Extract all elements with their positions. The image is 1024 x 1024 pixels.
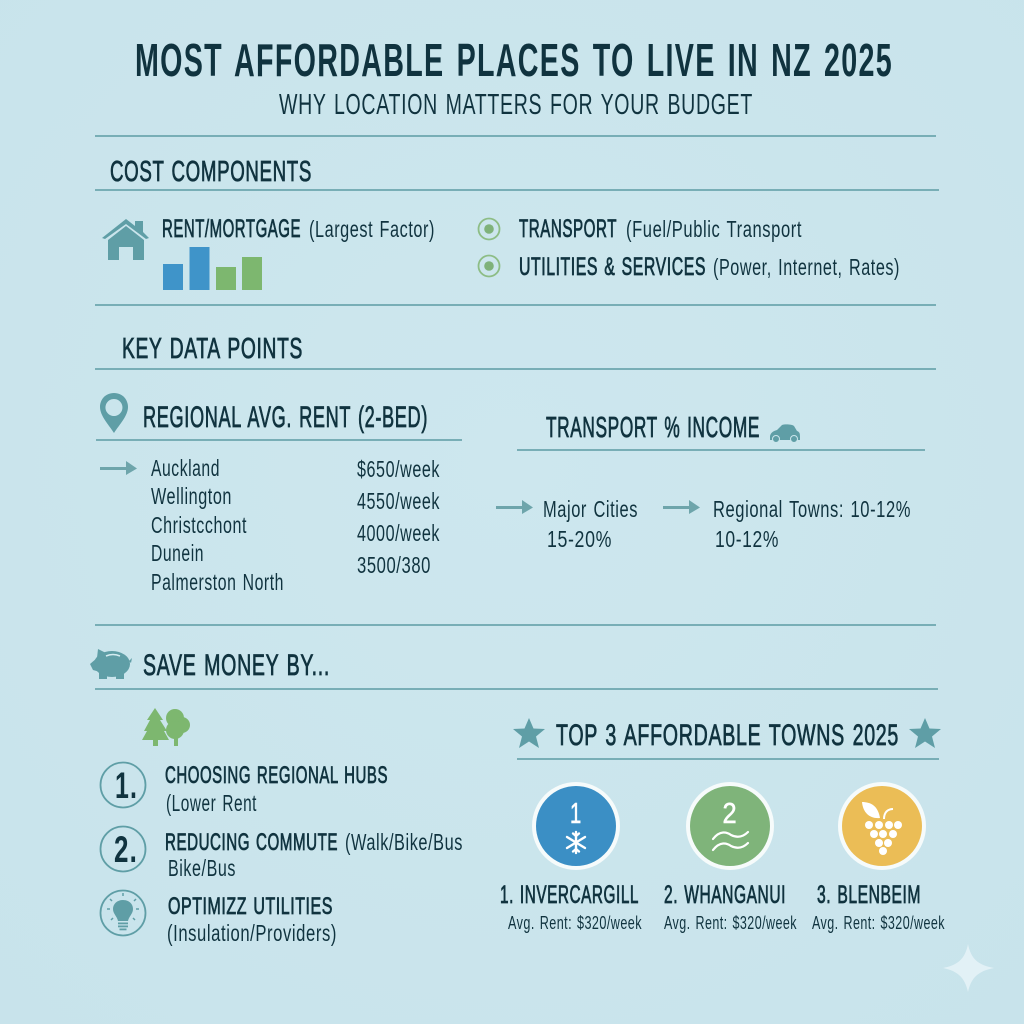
icon: car	[770, 424, 800, 442]
panel: top 3 affordable towns	[500, 718, 945, 933]
major cities value	[543, 496, 638, 552]
town 2 badge: 2	[722, 798, 738, 830]
panel: transport share of income	[496, 412, 925, 552]
tip 2: 2.	[114, 829, 138, 870]
major cities value: 15-20%	[547, 526, 612, 552]
rent values: $650/week	[357, 456, 440, 482]
tip 2: REDUCING COMMUTE	[165, 829, 338, 856]
town 3 label	[812, 881, 945, 933]
tip 3: OPTIMIZZ UTILITIES	[168, 893, 333, 920]
rent values	[357, 456, 440, 578]
heading: save money by: SAVE MONEY BY...	[143, 649, 330, 682]
text: rent or mortgage: (Largest Factor)	[309, 216, 435, 242]
heading: key data points: KEY DATA POINTS	[122, 333, 303, 365]
arrow	[663, 500, 700, 514]
tip 2	[100, 826, 463, 881]
heading: transport percent income: TRANSPORT % INCOME	[546, 412, 760, 444]
rent values: 4550/week	[357, 488, 440, 514]
city list	[151, 455, 284, 595]
text: utilities and services: (Power, Internet, Rates)	[713, 254, 900, 280]
rent values: 3500/380	[357, 552, 431, 578]
town 3 label: 3. BLENBEIM	[817, 881, 921, 909]
panel: save money	[90, 649, 463, 946]
icon: house	[102, 219, 149, 260]
arrow	[496, 500, 533, 514]
town 1 badge: 1	[570, 798, 582, 830]
town 2 badge	[686, 782, 774, 870]
town 2 label: Avg. Rent: $320/week	[664, 913, 797, 933]
heading: cost components: COST COMPONENTS	[110, 156, 312, 188]
subtitle: WHY LOCATION MATTERS FOR YOUR BUDGET	[279, 89, 753, 121]
tip 3: (Insulation/Providers)	[167, 920, 337, 946]
heading: regional average rent: REGIONAL AVG. RENT (2-BED)	[143, 401, 428, 434]
town 1 badge	[532, 782, 620, 870]
tip 1	[100, 762, 388, 816]
arrow	[100, 461, 137, 475]
tip 3	[100, 890, 337, 946]
city list: Palmerston North	[151, 569, 284, 595]
text: utilities and services: UTILITIES & SERVICES	[519, 253, 706, 281]
text: transport	[519, 215, 802, 243]
text: transport: (Fuel/Public Transport	[626, 216, 802, 242]
tip 2: Bike/Bus	[168, 855, 236, 881]
town 1 label: Avg. Rent: $320/week	[508, 913, 642, 933]
city list: Dunein	[151, 540, 204, 566]
town 3 label: Avg. Rent: $320/week	[812, 913, 945, 933]
city list: Auckland	[151, 455, 220, 481]
icon: right star	[909, 718, 941, 748]
icon: utilities bullet	[478, 256, 500, 276]
panel: regional average rent	[96, 393, 462, 595]
tip 1: 1.	[115, 765, 138, 806]
town 2 label: 2. WHANGANUI	[664, 881, 786, 909]
city list: Christcchont	[151, 512, 247, 538]
tip 1: (Lower Rent	[166, 790, 257, 816]
city list: Wellington	[151, 483, 232, 509]
tip 1: CHOOSING REGIONAL HUBS	[165, 762, 388, 789]
icon: left star	[513, 718, 545, 748]
text: transport: TRANSPORT	[519, 215, 617, 243]
major cities value: Major Cities	[543, 496, 638, 522]
icon: piggy bank	[90, 649, 132, 679]
icon: sparkle	[943, 944, 994, 992]
regional towns value: Regional Towns: 10-12%	[713, 496, 911, 522]
panel: cost components	[102, 156, 900, 290]
text: rent or mortgage: RENT/MORTGAGE	[162, 215, 301, 243]
icon: transport bullet	[478, 218, 500, 240]
bar chart	[163, 247, 262, 290]
regional towns value: 10-12%	[715, 526, 779, 552]
town 2 label	[664, 881, 797, 933]
icon: map pin	[100, 393, 128, 433]
town 1 label: 1. INVERCARGILL	[500, 881, 639, 909]
icon: trees	[142, 708, 190, 746]
regional towns value	[713, 496, 911, 552]
town 3 badge	[838, 782, 926, 870]
town 1 label	[500, 881, 642, 933]
tip 2: (Walk/Bike/Bus	[345, 829, 463, 855]
rent values: 4000/week	[357, 520, 440, 546]
